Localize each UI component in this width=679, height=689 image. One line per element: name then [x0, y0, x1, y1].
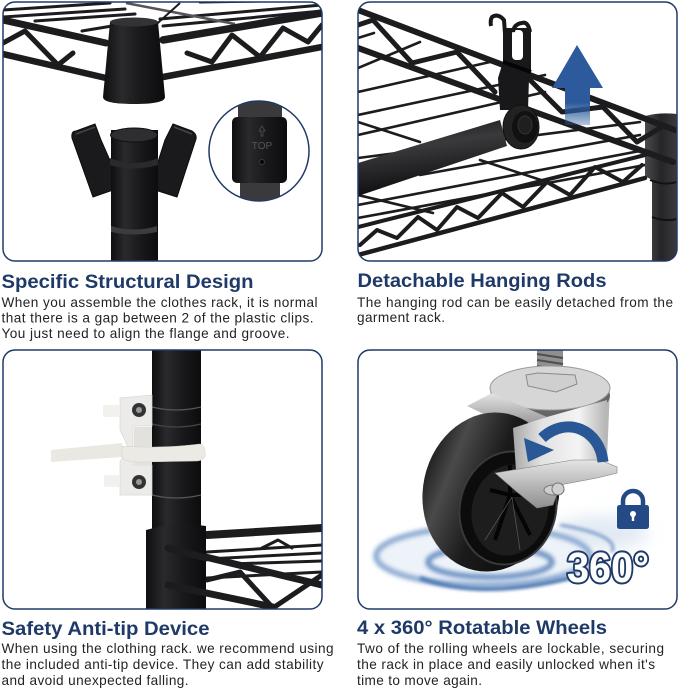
wheel	[422, 412, 560, 572]
left clip	[72, 124, 113, 197]
text block: structural design description: When you assemble the clothes rack, it is normal	[2, 295, 318, 310]
bottom rail	[358, 155, 645, 255]
text block: hanging rods description	[357, 295, 673, 325]
padlock icon	[617, 491, 649, 529]
shelf collar	[146, 524, 206, 609]
upper rails	[358, 10, 675, 162]
heading: Specific Structural Design: Specific Structural Design	[2, 272, 253, 293]
heading: Safety Anti-tip Device: Safety Anti-tip Device	[2, 619, 210, 640]
panel: rotatable wheels photo	[358, 350, 677, 609]
blue rotation arrow	[524, 427, 603, 462]
cable tie	[51, 443, 205, 462]
right clip	[155, 124, 196, 197]
text block: structural design description: that there is a gap between 2 of the plastic clips.	[2, 310, 314, 326]
wire shelf top	[3, 0, 322, 78]
water ripple	[375, 516, 648, 589]
caster bolt	[536, 350, 564, 366]
text block: wheels description: the rack in place and easily unlocked when it's	[357, 657, 655, 672]
left front rails	[3, 20, 106, 78]
housing lower	[513, 400, 607, 470]
text block: wheels description	[357, 641, 664, 688]
text block: wheels description: time to move again.	[357, 673, 482, 688]
post with plastic clips	[72, 124, 196, 261]
text block: anti-tip description	[2, 641, 334, 688]
text block: anti-tip description: and avoid unexpected falling.	[2, 673, 188, 688]
text block: anti-tip description: When using the clothing rack. we recommend using	[2, 641, 334, 656]
360 degree label: 360°	[567, 544, 649, 592]
heading: 4 x 360° Rotatable Wheels: 4 x 360° Rotatable Wheels	[357, 618, 607, 639]
text block: structural design description: You just need to align the flange and groove.	[2, 326, 290, 341]
text block: hanging rods description: garment rack.	[357, 310, 445, 325]
shelf cross wires	[358, 33, 645, 218]
rod knob	[503, 105, 539, 149]
inset circle: TOP clip detail	[209, 100, 309, 204]
text block: hanging rods description: The hanging rod can be easily detached from the	[357, 295, 673, 310]
post	[645, 113, 677, 261]
text block: structural design description	[2, 295, 318, 341]
post body	[111, 130, 158, 261]
text block: anti-tip description: the included anti-tip device. They can add stability	[2, 657, 324, 672]
washer and housing	[467, 366, 610, 468]
white anti-tip bracket	[103, 395, 152, 495]
panel: specific structural design photo	[3, 0, 322, 261]
text block: wheels description: Two of the rolling wheels are lockable, securing	[357, 641, 664, 656]
inset circle: TOP clip detail: TOP	[252, 141, 273, 152]
brake lever	[495, 460, 617, 508]
shelf wires	[206, 524, 322, 608]
panel: detachable hanging rods photo	[358, 2, 677, 261]
blue up arrow	[552, 45, 603, 125]
heading: Detachable Hanging Rods: Detachable Hanging Rods	[358, 271, 606, 292]
shelf sleeve cone	[103, 18, 165, 104]
right front rails	[163, 13, 322, 77]
upright post	[152, 350, 201, 530]
panel: safety anti-tip device photo	[3, 350, 322, 609]
hanging rod	[358, 120, 507, 196]
rod hook	[491, 16, 531, 110]
